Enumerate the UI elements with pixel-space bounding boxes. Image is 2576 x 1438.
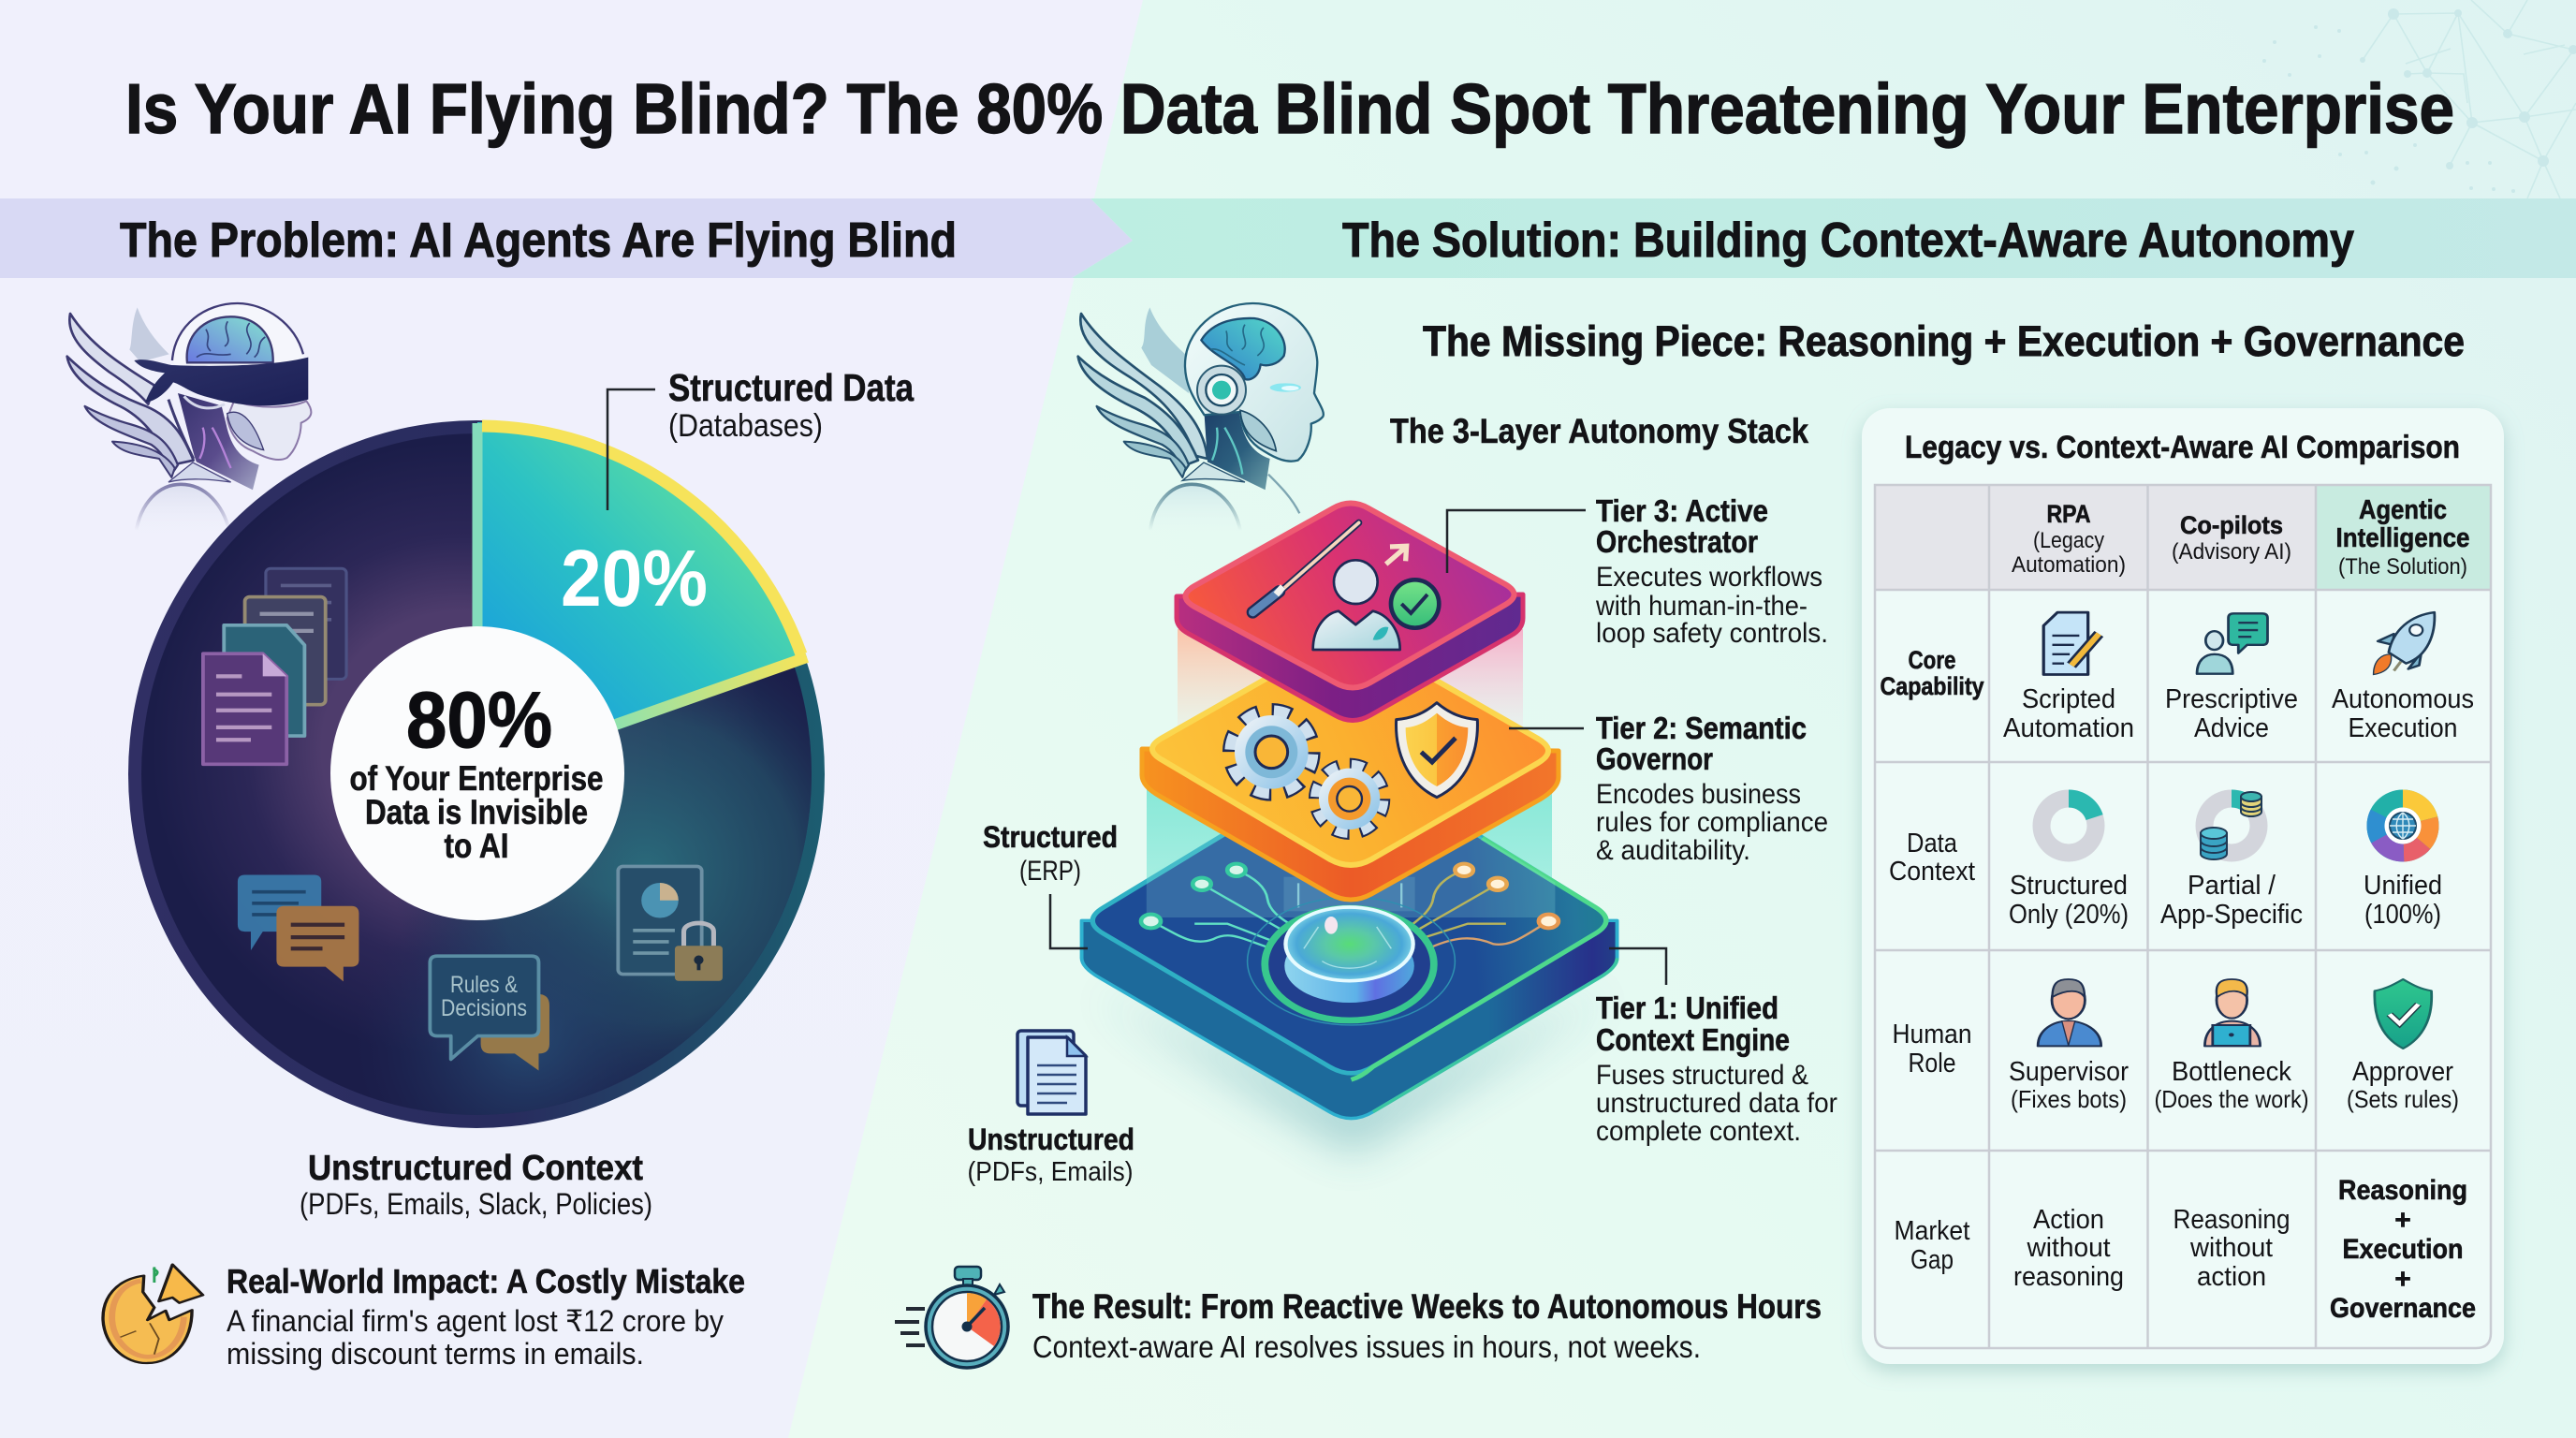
text: bottleneck: Bottleneck [2172,1057,2291,1087]
icon: context-aware winged AI head [1078,303,1324,534]
callout: tier 2: Encodes business [1596,779,1801,810]
callout: real-world impact: missing discount terms in emails. [227,1337,644,1371]
callout: tier 1: Context Engine [1596,1022,1790,1057]
callout: the result [1032,1287,1822,1364]
text: partial app-specific [2160,871,2303,930]
row label: market gap [1895,1216,1969,1275]
callout: structured ERP input [983,820,1118,948]
icon: partial donut with databases [2201,792,2261,859]
callout: structured data [607,366,915,510]
column header: RPA [2012,500,2126,578]
text: action without reasoning: Action [2033,1205,2104,1235]
text: scripted automation: Scripted [2022,684,2115,714]
callout: structured ERP input: Structured [983,820,1118,854]
label: unstructured input [968,1123,1134,1187]
callout: the result: Context-aware AI resolves issues in hours, not weeks. [1032,1329,1701,1364]
column header: agentic intelligence: (The Solution) [2338,554,2467,580]
text: scripted automation [2003,684,2134,743]
text: approver: (Sets rules) [2347,1085,2459,1113]
text: action without reasoning [2013,1205,2124,1292]
pie centre hole [330,626,624,920]
callout: tier 3: with human-in-the- [1595,591,1808,622]
label: 80% centre text: Data is Invisible [365,793,588,831]
text: prescriptive advice [2165,684,2298,743]
label: 80% centre text: to AI [444,827,509,865]
icon: supervisor [2038,979,2101,1046]
text: unified: (100%) [2364,900,2441,930]
text: reasoning without action: without [2189,1233,2273,1263]
text: structured only: Only (20%) [2009,900,2129,930]
callout: tier 1: Tier 1: Unified [1596,990,1778,1025]
heading: comparison: Legacy vs. Context-Aware AI Comparison [1905,430,2460,465]
layer: tier 2 semantic governor [1142,637,1559,900]
chart: 80/20 data pie [128,420,825,1128]
row label: human role: Role [1908,1049,1956,1078]
text: structured only [2009,871,2129,930]
callout: tier 3 [1447,493,1828,649]
icon: 20% donut [2042,799,2096,853]
icon: approver shield [2375,979,2432,1049]
icon: gears and shield [1232,703,1477,832]
text: reasoning without action: action [2197,1262,2266,1292]
label: unstructured context: Unstructured Context [308,1149,643,1188]
text: reasoning without action: Reasoning [2174,1205,2290,1235]
icon: blindfolded winged AI head [67,303,311,534]
icon: broken coin [103,1265,203,1363]
text: reasoning + execution + governance: Governance [2330,1293,2476,1324]
text: supervisor: Supervisor [2009,1057,2129,1087]
text: structured only: Structured [2010,871,2128,901]
heading: missing piece: The Missing Piece: Reasoning + Execution + Governance [1423,317,2465,365]
text: reasoning + execution + governance: Reasoning [2338,1175,2467,1206]
text: supervisor [2009,1057,2129,1113]
text: reasoning without action [2174,1205,2290,1292]
column header: RPA: RPA [2046,500,2091,528]
text: autonomous execution [2332,684,2474,743]
column header: co-pilots: Co-pilots [2180,511,2283,539]
icon: unstructured documents [1017,1031,1086,1114]
icon: chat bubbles [238,874,359,981]
callout: tier 1: unstructured data for [1596,1088,1837,1119]
table grid [1875,485,2491,1348]
callout: tier 3: Orchestrator [1596,524,1758,559]
text: bottleneck [2155,1057,2308,1113]
heading: 3-layer stack: The 3-Layer Autonomy Stack [1390,412,1808,450]
column header: RPA: Automation) [2012,552,2126,578]
label: 80% centre text [350,676,603,865]
text: supervisor: (Fixes bots) [2011,1085,2127,1113]
heading: the problem: The Problem: AI Agents Are Flying Blind [120,213,957,268]
label: unstructured context [300,1149,652,1221]
section band: solution [1072,198,2576,278]
text: approver: Approver [2352,1057,2453,1087]
text: reasoning + execution + governance: + [2394,1264,2411,1295]
column header: co-pilots [2172,511,2291,565]
icon: rules and decisions bubble: Decisions [441,995,527,1021]
row label: core capability [1880,646,1984,700]
core lens [1248,897,1455,1025]
text: partial app-specific: App-Specific [2160,900,2303,930]
callout: tier 1: complete context. [1596,1116,1801,1147]
icon: unified donut with globe [2376,799,2430,853]
callout: real-world impact [227,1262,745,1371]
callout: the result: The Result: From Reactive Weeks to Autonomous Hours [1032,1287,1822,1326]
panel: comparison table card [1862,408,2504,1364]
icon: rocket [2374,612,2435,675]
heading: the solution: The Solution: Building Context-Aware Autonomy [1342,213,2354,268]
row label: market gap: Gap [1910,1245,1954,1275]
text: prescriptive advice: Advice [2194,713,2269,743]
callout: tier 3: loop safety controls. [1596,618,1828,649]
row label: market gap: Market [1895,1216,1969,1246]
icon: advisor with speech bubble [2197,613,2267,674]
callout: tier 2: rules for compliance [1596,807,1828,838]
icon: locked report [618,866,723,981]
text: unified [2364,871,2442,930]
text: unified: Unified [2364,871,2442,901]
column header: RPA: (Legacy [2033,528,2104,553]
label: 80% centre text: of Your Enterprise [350,759,603,798]
layer: tier 1 unified context engine [1082,764,1617,1119]
label: 20%: 20% [561,535,708,624]
text: action without reasoning: reasoning [2013,1262,2124,1292]
row label: core capability: Core [1908,646,1956,674]
icon: rules and decisions bubble [430,956,549,1071]
text: reasoning + execution + governance [2330,1175,2476,1324]
text: partial app-specific: Partial / [2188,871,2276,901]
row label: data context [1889,829,1975,887]
text: bottleneck: (Does the work) [2155,1085,2308,1113]
central beam [1284,877,1415,911]
text: autonomous execution: Autonomous [2332,684,2474,714]
beam wash on tier 1 [1147,764,1555,917]
light beam: tier 2 to tier 3 [1178,629,1523,746]
callout: tier 3: Tier 3: Active [1596,493,1768,528]
label: unstructured input: Unstructured [968,1123,1134,1156]
column header: agentic intelligence: Agentic [2359,495,2447,525]
icon: document stack [203,568,346,764]
text: reasoning + execution + governance: + [2394,1205,2411,1236]
callout: real-world impact: Real-World Impact: A Costly Mistake [227,1262,745,1300]
text: autonomous execution: Execution [2348,713,2458,743]
diagram: 3-layer autonomy stack [1082,504,1617,1152]
label: unstructured context: (PDFs, Emails, Slack, Policies) [300,1187,652,1221]
callout: structured ERP input: (ERP) [1019,856,1081,887]
callout: tier 2: Tier 2: Semantic [1596,711,1807,745]
column header: co-pilots: (Advisory AI) [2172,539,2291,565]
light beam: tier 1 to tier 2 [1147,777,1552,978]
section band: problem [0,198,1133,278]
text: reasoning + execution + governance: Execution [2342,1234,2464,1265]
callout: real-world impact: A financial firm's agent lost ₹12 crore by [227,1304,724,1338]
circuit traces [1150,870,1548,950]
callout: structured data: Structured Data [668,366,915,409]
callout: tier 2 [1509,711,1828,866]
row label: human role: Human [1893,1020,1971,1049]
text: prescriptive advice: Prescriptive [2165,684,2298,714]
icon: rules and decisions bubble: Rules & [450,972,518,998]
column header: agentic intelligence [2336,495,2469,580]
segment: structured 20% [477,422,807,773]
callout: structured data: (Databases) [668,408,823,444]
label: unstructured input: (PDFs, Emails) [968,1157,1133,1187]
text: approver [2347,1057,2459,1113]
callout: tier 1: Fuses structured & [1596,1060,1808,1091]
icon: wand, person and check [1252,522,1442,650]
callout: tier 1 [1596,948,1837,1147]
text: action without reasoning: without [2027,1233,2110,1263]
layer: tier 3 active orchestrator [1177,504,1523,721]
row label: human role [1893,1020,1971,1078]
callout: tier 2: Governor [1596,741,1713,776]
row label: data context: Context [1889,857,1975,887]
callout: tier 2: & auditability. [1596,835,1750,866]
icon: scripted document [2043,612,2099,675]
label: 80% centre text: 80% [406,676,552,764]
icon: bottleneck worker [2204,979,2261,1046]
row label: data context: Data [1907,829,1958,858]
callout: tier 3: Executes workflows [1596,562,1822,593]
text: scripted automation: Automation [2003,713,2134,743]
column header: agentic intelligence: Intelligence [2336,523,2469,553]
icon: stopwatch [895,1267,1008,1368]
row label: core capability: Capability [1880,672,1984,700]
